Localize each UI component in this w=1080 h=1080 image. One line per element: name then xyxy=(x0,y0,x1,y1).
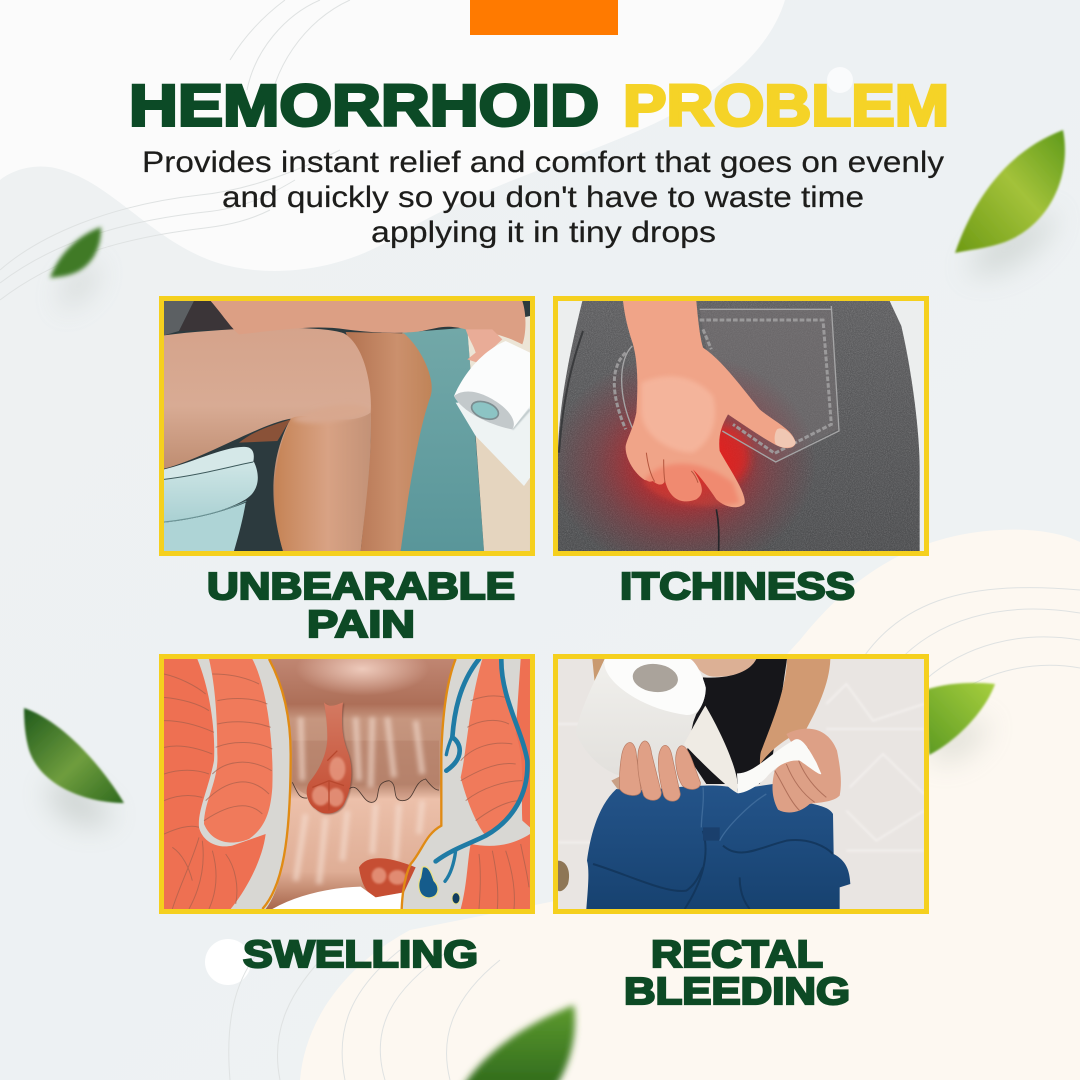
subtitle xyxy=(142,146,944,249)
leaf: top right xyxy=(955,130,1065,275)
orange tab xyxy=(470,0,618,35)
leaf: top left blurred xyxy=(50,227,101,312)
title: HEMORRHOID xyxy=(129,74,599,138)
label: rectal bleeding: RECTAL xyxy=(651,934,823,976)
title xyxy=(129,74,949,138)
label: itchiness: ITCHINESS xyxy=(620,566,855,608)
label: unbearable pain: UNBEARABLE xyxy=(207,566,515,608)
label: rectal bleeding: BLEEDING xyxy=(624,971,850,1013)
subtitle: applying it in tiny drops xyxy=(371,216,716,249)
label: rectal bleeding xyxy=(624,934,850,1013)
leaf: right middle xyxy=(925,683,995,762)
label: unbearable pain: PAIN xyxy=(307,604,415,646)
panel: itchiness photo xyxy=(550,296,929,573)
label: swelling: SWELLING xyxy=(243,934,478,976)
panel: unbearable pain photo xyxy=(159,296,535,556)
leaf: bottom centre blurred xyxy=(462,1005,575,1080)
panel: swelling anatomy illustration xyxy=(159,642,535,914)
label: unbearable pain xyxy=(207,566,515,646)
panel: rectal bleeding photo xyxy=(553,654,929,914)
subtitle: Provides instant relief and comfort that goes on evenly xyxy=(142,146,944,179)
leaf: bottom left xyxy=(24,708,124,826)
title: PROBLEM xyxy=(623,74,949,138)
subtitle: and quickly so you don't have to waste time xyxy=(222,181,864,214)
